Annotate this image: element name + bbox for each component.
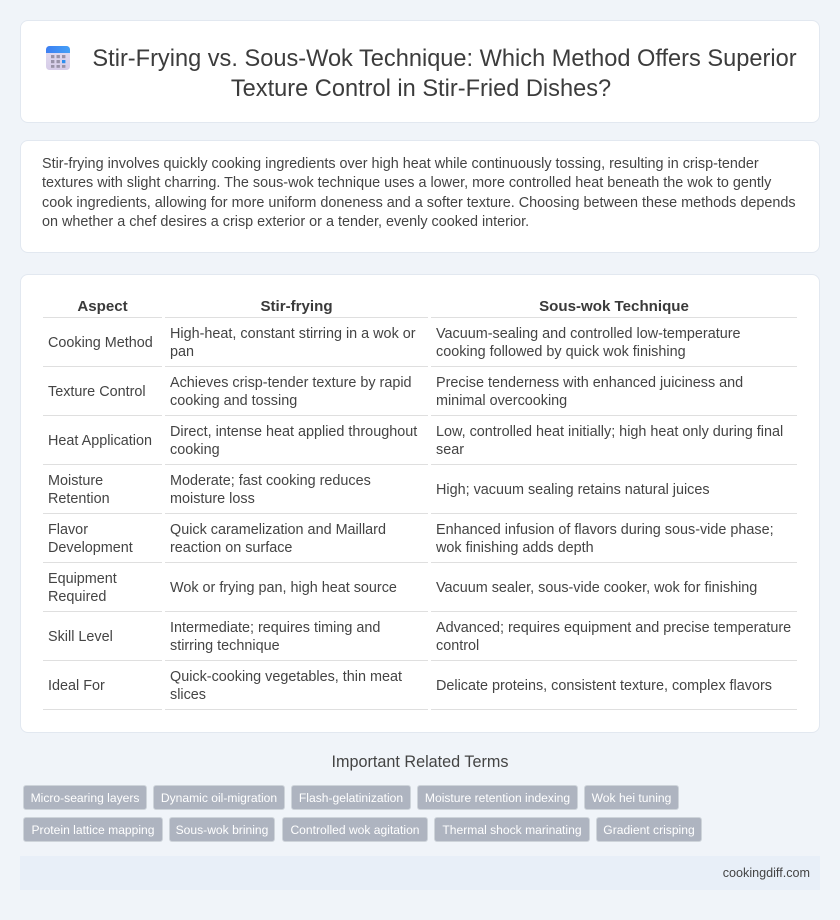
comparison table: control xyxy=(436,638,479,654)
comparison table: stirring technique xyxy=(170,638,280,654)
comparison table: Wok or frying pan, high heat source xyxy=(170,580,397,596)
related term tags: Gradient crisping xyxy=(603,823,695,837)
comparison table: Direct, intense heat applied throughout xyxy=(170,424,417,440)
intro card xyxy=(20,140,820,253)
related term tags: Micro-searing layers xyxy=(31,791,139,805)
intro text: cook ingredients, allowing for more uniform doneness and a softer texture. Choosing between these methods depends xyxy=(42,195,796,211)
comparison table: cooking and tossing xyxy=(170,393,297,409)
comparison table: Vacuum sealer, sous-vide cooker, wok for finishing xyxy=(436,580,757,596)
title card xyxy=(20,20,820,123)
comparison table: minimal overcooking xyxy=(436,393,567,409)
comparison table: reaction on surface xyxy=(170,540,292,556)
comparison table: Retention xyxy=(48,491,110,507)
comparison table: slices xyxy=(170,687,206,703)
comparison table: Moderate; fast cooking reduces xyxy=(170,473,371,489)
comparison table: cooking followed by quick wok finishing xyxy=(436,344,686,360)
related term tags: Dynamic oil-migration xyxy=(161,791,277,805)
intro text: textures with slight charring. The sous-wok technique uses a lower, more controlled heat beneath the wok to gently xyxy=(42,175,771,191)
comparison table: Intermediate; requires timing and xyxy=(170,620,380,636)
comparison table: Advanced; requires equipment and precise temperature xyxy=(436,620,791,636)
related term tags xyxy=(23,785,702,842)
comparison table: Heat Application xyxy=(48,433,152,449)
related term tags: Sous-wok brining xyxy=(176,823,268,837)
related term tags: Thermal shock marinating xyxy=(442,823,582,837)
comparison table: Delicate proteins, consistent texture, complex flavors xyxy=(436,678,772,694)
comparison table: Stir-frying xyxy=(260,298,333,315)
intro text: Stir-frying involves quickly cooking ingredients over high heat while continuously tossing, resulting in crisp-tender xyxy=(42,156,759,172)
comparison table: Quick caramelization and Maillard xyxy=(170,522,386,538)
comparison table: Development xyxy=(48,540,133,556)
comparison table: sear xyxy=(436,442,464,458)
comparison table: Skill Level xyxy=(48,629,113,645)
comparison table: cooking xyxy=(170,442,220,458)
intro text: on whether a chef desires a crisp exterior or a tender, evenly cooked interior. xyxy=(42,214,529,230)
comparison table: High; vacuum sealing retains natural juices xyxy=(436,482,710,498)
comparison table: Flavor xyxy=(48,522,88,538)
intro text xyxy=(42,156,796,230)
table card xyxy=(20,274,820,733)
footer bar xyxy=(20,856,820,890)
comparison table xyxy=(43,298,797,710)
comparison table: moisture loss xyxy=(170,491,255,507)
comparison table: Moisture xyxy=(48,473,103,489)
title: Texture Control in Stir-Fried Dishes? xyxy=(231,76,611,102)
comparison table: Ideal For xyxy=(48,678,105,694)
icon: calendar grid xyxy=(46,46,70,70)
related term tags: Protein lattice mapping xyxy=(31,823,155,837)
comparison table: Aspect xyxy=(77,298,128,315)
comparison table: Equipment xyxy=(48,571,117,587)
comparison table: pan xyxy=(170,344,194,360)
title: Stir-Frying vs. Sous-Wok Technique: Which Method Offers Superior xyxy=(92,46,797,72)
comparison table: Vacuum-sealing and controlled low-temperature xyxy=(436,326,740,342)
related term tags: Wok hei tuning xyxy=(592,791,671,805)
related terms heading: Important Related Terms xyxy=(332,753,508,771)
comparison table: Sous-wok Technique xyxy=(539,298,689,315)
comparison table: Quick-cooking vegetables, thin meat xyxy=(170,669,402,685)
related term tags: Moisture retention indexing xyxy=(425,791,570,805)
comparison table: High-heat, constant stirring in a wok or xyxy=(170,326,416,342)
comparison table: wok finishing adds depth xyxy=(436,540,594,556)
comparison table: Cooking Method xyxy=(48,335,153,351)
comparison table: Low, controlled heat initially; high heat only during final xyxy=(436,424,783,440)
comparison table: Precise tenderness with enhanced juiciness and xyxy=(436,375,743,391)
related term tags: Controlled wok agitation xyxy=(290,823,420,837)
source label: cookingdiff.com xyxy=(723,866,810,880)
title xyxy=(92,46,797,102)
comparison table: Texture Control xyxy=(48,384,146,400)
related term tags: Flash-gelatinization xyxy=(299,791,403,805)
comparison table: Achieves crisp-tender texture by rapid xyxy=(170,375,412,391)
comparison table: Required xyxy=(48,589,106,605)
comparison table: Enhanced infusion of flavors during sous-vide phase; xyxy=(436,522,774,538)
